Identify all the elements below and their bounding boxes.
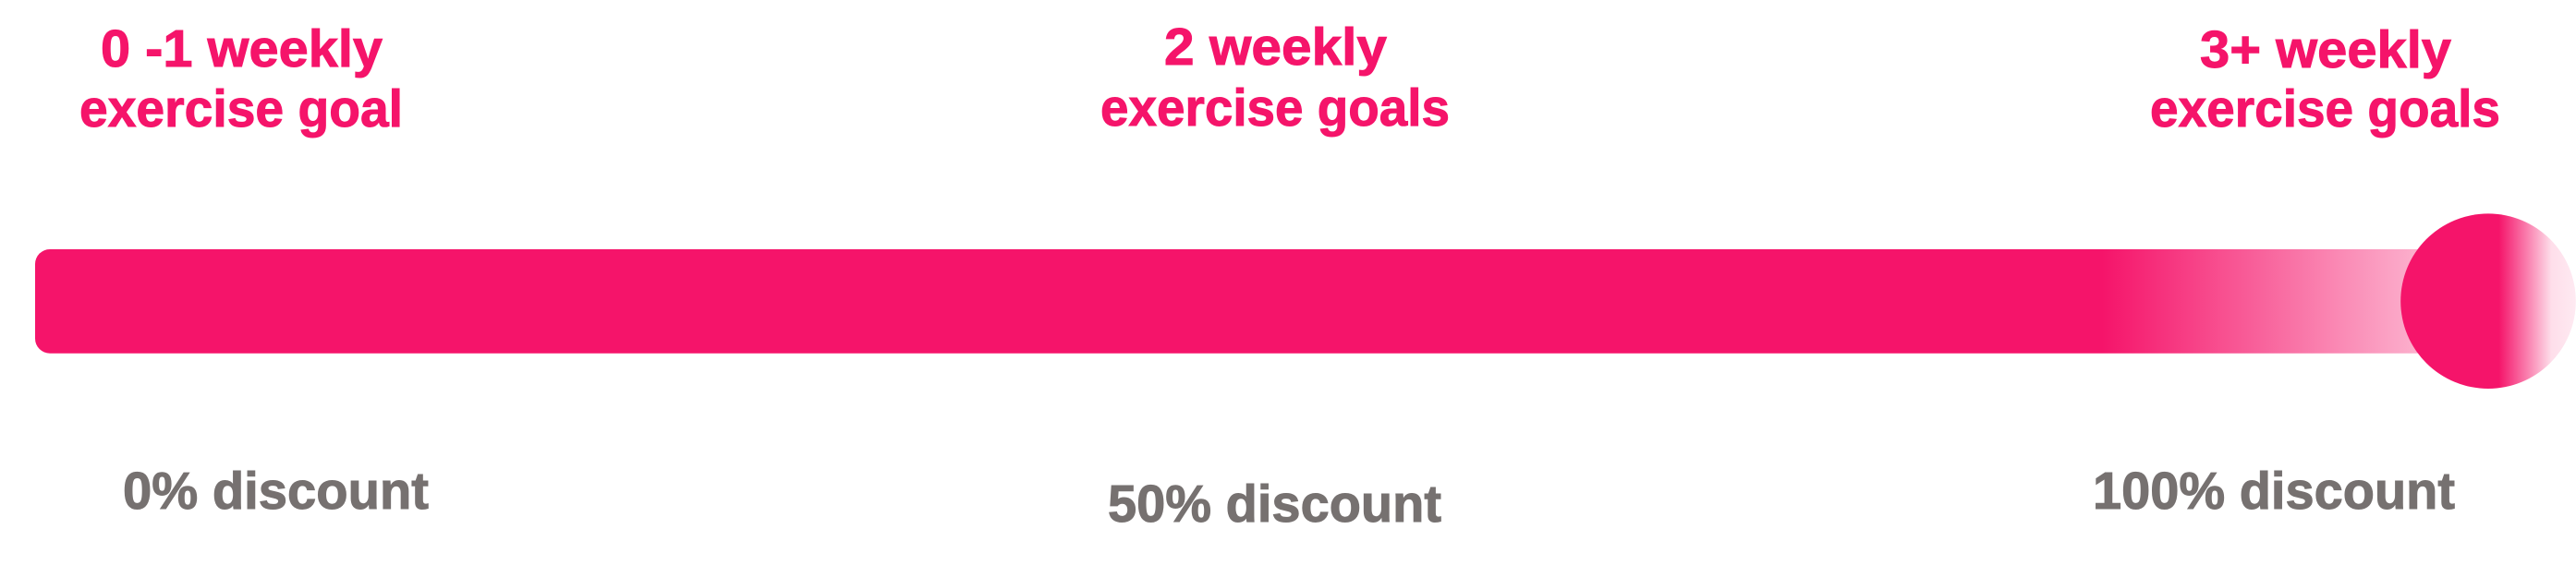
heading: 2 weekly exercise goals: exercise goals <box>1100 78 1450 138</box>
label: 50% discount: 50% discount <box>1108 475 1441 534</box>
heading: 3+ weekly exercise goals <box>2150 20 2500 138</box>
heading: 2 weekly exercise goals: 2 weekly <box>1164 18 1387 77</box>
heading: 3+ weekly exercise goals: 3+ weekly <box>2200 20 2451 79</box>
heading: 0-1 weekly exercise goal: exercise goal <box>79 79 403 138</box>
heading: 2 weekly exercise goals <box>1100 18 1450 138</box>
heading: 0-1 weekly exercise goal <box>79 19 403 138</box>
heading: 3+ weekly exercise goals: exercise goals <box>2150 79 2500 138</box>
label: 0% discount: 0% discount <box>123 462 429 521</box>
label: 100% discount: 100% discount <box>2093 462 2455 521</box>
progress marker circle <box>2400 213 2576 389</box>
heading: 0-1 weekly exercise goal: 0 -1 weekly <box>101 19 383 78</box>
progress bar <box>35 249 2421 354</box>
